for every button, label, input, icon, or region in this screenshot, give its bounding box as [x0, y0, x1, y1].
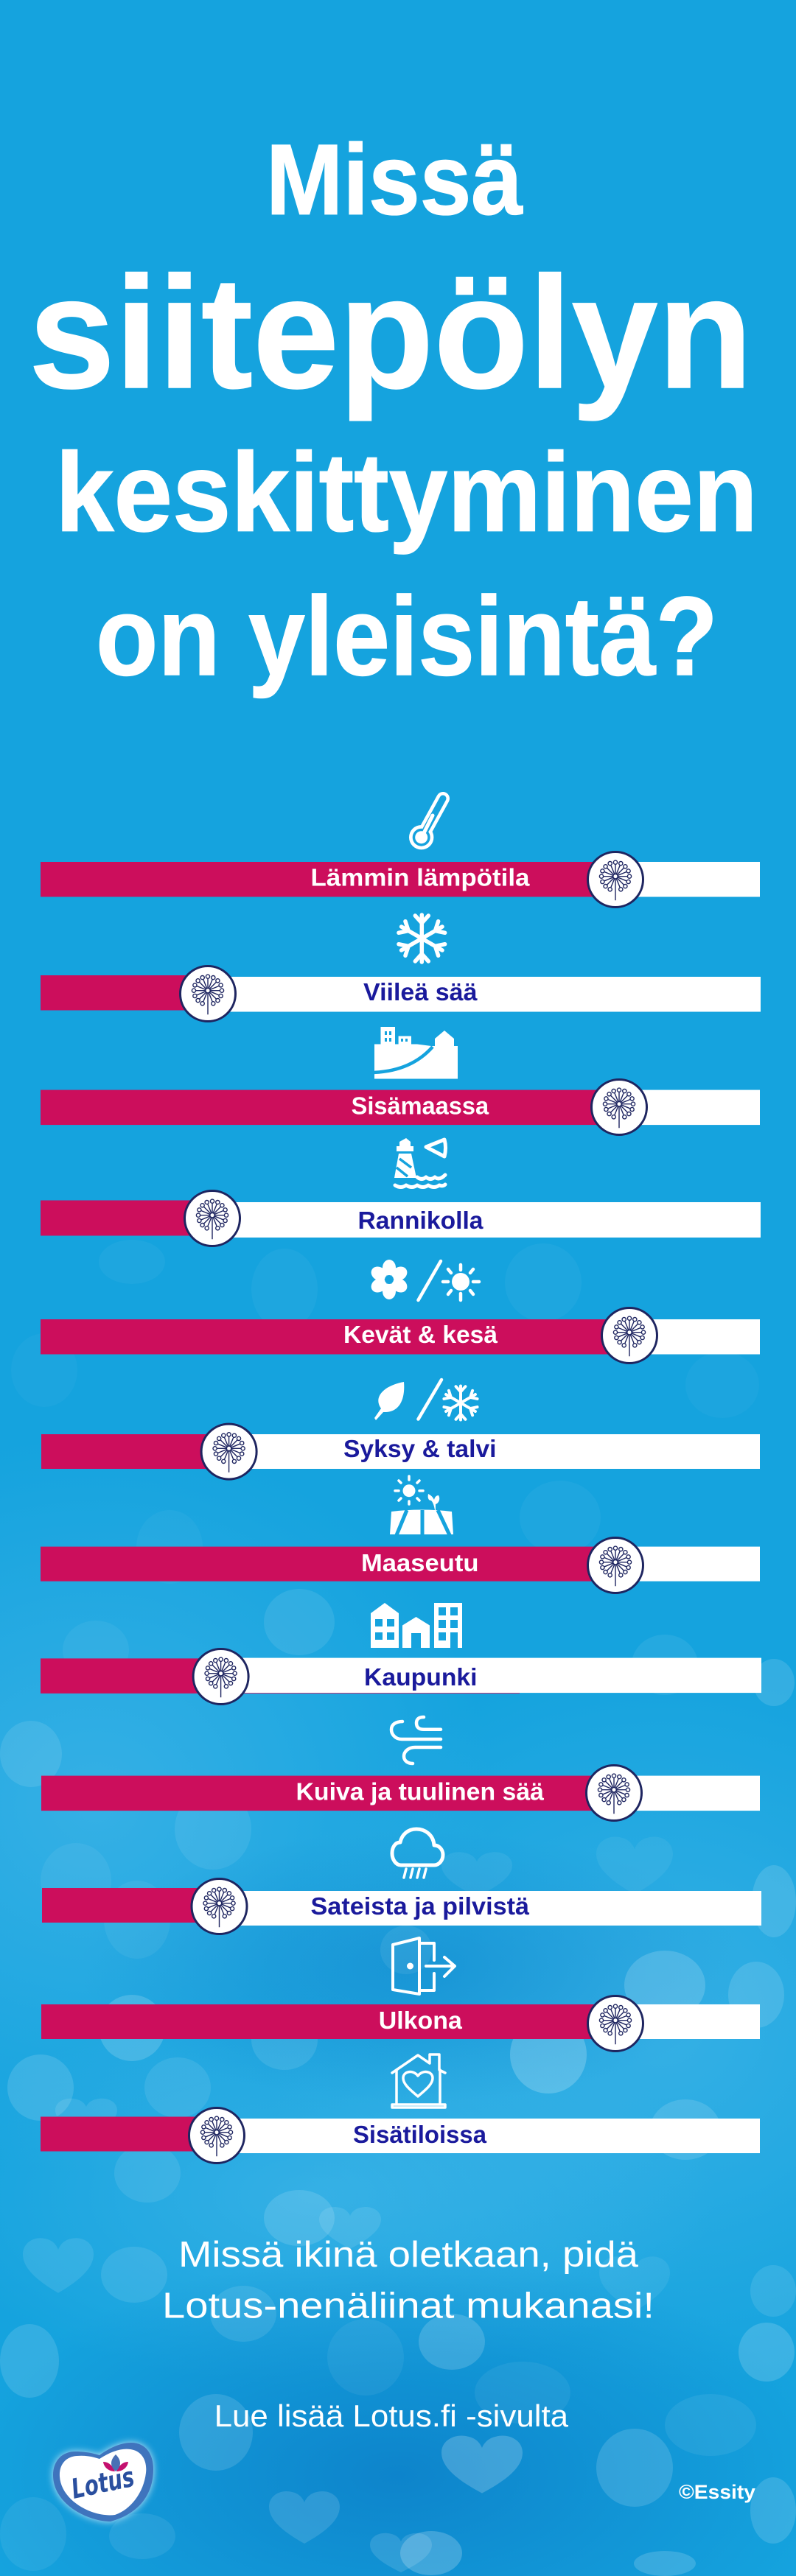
bar	[41, 1658, 761, 1694]
row: Sisätiloissa	[41, 2054, 760, 2163]
label: Kaupunki	[364, 1663, 478, 1691]
row: Maaseutu	[41, 1476, 760, 1593]
icon: rain cloud	[392, 1829, 443, 1878]
icon: door with arrow	[393, 1938, 455, 1994]
closing message: Lotus-nenäliinat mukanasi!	[162, 2287, 654, 2326]
icon: thermometer	[409, 799, 443, 849]
bar	[41, 2004, 760, 2039]
row: Viileä sää	[41, 915, 761, 1021]
icon: dandelion marker	[184, 1190, 240, 1246]
icon: dandelion marker	[192, 1878, 247, 1934]
row: Rannikolla	[41, 1138, 761, 1246]
bar	[41, 862, 760, 897]
title	[29, 124, 758, 699]
icon: dandelion marker	[588, 852, 643, 908]
icon: dandelion marker	[201, 1424, 256, 1479]
label: Viileä sää	[363, 978, 478, 1006]
icon: dandelion marker	[591, 1080, 647, 1134]
icon: leaf and snowflake	[374, 1380, 478, 1420]
label: Rannikolla	[358, 1207, 483, 1234]
row: Ulkona	[41, 1938, 760, 2051]
title: on yleisintä?	[96, 574, 718, 699]
label: Kuiva ja tuulinen sää	[296, 1778, 545, 1805]
logo: Lotus	[53, 2443, 153, 2521]
icon: dandelion marker	[189, 2108, 245, 2163]
row: Syksy & talvi	[41, 1380, 760, 1479]
icon: inland landscape	[373, 1027, 458, 1078]
icon: dandelion marker	[588, 1538, 643, 1593]
bar	[41, 1434, 760, 1469]
logo: Lotus: Lotus	[69, 2461, 137, 2505]
icon: dandelion marker	[587, 1765, 641, 1821]
bar	[41, 975, 761, 1012]
label: Sisätiloissa	[353, 2121, 487, 2148]
label: Maaseutu	[361, 1549, 479, 1576]
icon: snowflake	[398, 915, 446, 962]
icon: lighthouse	[394, 1138, 445, 1187]
icon: dandelion marker	[588, 1996, 643, 2051]
link text: Lue lisää Lotus.fi -sivulta	[214, 2398, 569, 2433]
row: Sisämaassa	[41, 1027, 760, 1134]
row: Kaupunki	[41, 1603, 761, 1705]
icon: city houses	[371, 1603, 462, 1648]
bar	[41, 2117, 760, 2153]
label: Sateista ja pilvistä	[311, 1892, 530, 1920]
row: Lämmin lämpötila	[41, 799, 760, 908]
row: Kuiva ja tuulinen sää	[41, 1717, 760, 1821]
icon: flower and sun	[369, 1260, 479, 1300]
bar	[42, 1888, 761, 1926]
label: Lämmin lämpötila	[311, 863, 530, 891]
bar	[41, 1319, 760, 1354]
title: siitepölyn	[29, 243, 753, 421]
bar	[41, 1547, 760, 1582]
label: Sisämaassa	[352, 1092, 489, 1120]
icon: house with heart	[392, 2054, 445, 2108]
label: Kevät & kesä	[343, 1321, 498, 1348]
icon: wind	[391, 1717, 441, 1763]
bar	[41, 1090, 760, 1125]
icon: sun over field	[390, 1476, 453, 1535]
row: Sateista ja pilvistä	[42, 1829, 761, 1934]
icon: dandelion marker	[193, 1649, 248, 1705]
bar	[41, 1776, 760, 1811]
copyright: ©Essity	[679, 2481, 755, 2503]
bar	[41, 1201, 761, 1238]
row: Kevät & kesä	[41, 1260, 760, 1363]
closing message	[162, 2235, 654, 2326]
icon: dandelion marker	[601, 1308, 657, 1363]
label: Syksy & talvi	[343, 1435, 497, 1462]
closing message: Missä ikinä oletkaan, pidä	[178, 2235, 639, 2275]
label: Ulkona	[379, 2007, 462, 2034]
icon: dandelion marker	[180, 966, 236, 1021]
title: Missä	[266, 124, 523, 236]
title: keskittyminen	[55, 430, 758, 555]
